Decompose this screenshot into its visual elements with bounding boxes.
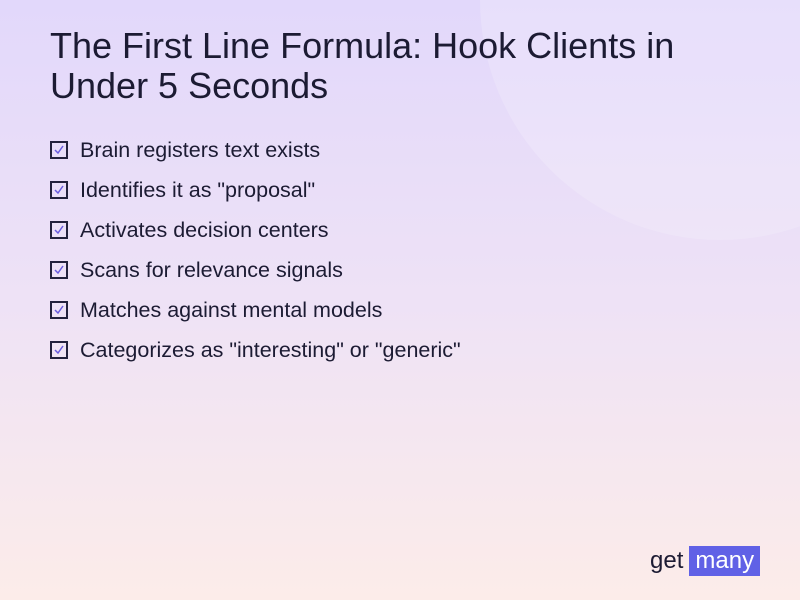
item 1: Brain registers text exists xyxy=(80,138,320,162)
item 4: Scans for relevance signals xyxy=(80,258,343,282)
logo xyxy=(650,546,760,576)
logo: many xyxy=(695,547,754,574)
item 6: Categorizes as "interesting" or "generic" xyxy=(80,338,461,362)
logo: get xyxy=(650,547,683,574)
checklist xyxy=(50,138,461,362)
item 3: Activates decision centers xyxy=(80,218,329,242)
item 2: Identifies it as "proposal" xyxy=(80,178,315,202)
item 5: Matches against mental models xyxy=(80,298,382,322)
title: The First Line Formula: Hook Clients in Under 5 Seconds xyxy=(50,25,674,106)
